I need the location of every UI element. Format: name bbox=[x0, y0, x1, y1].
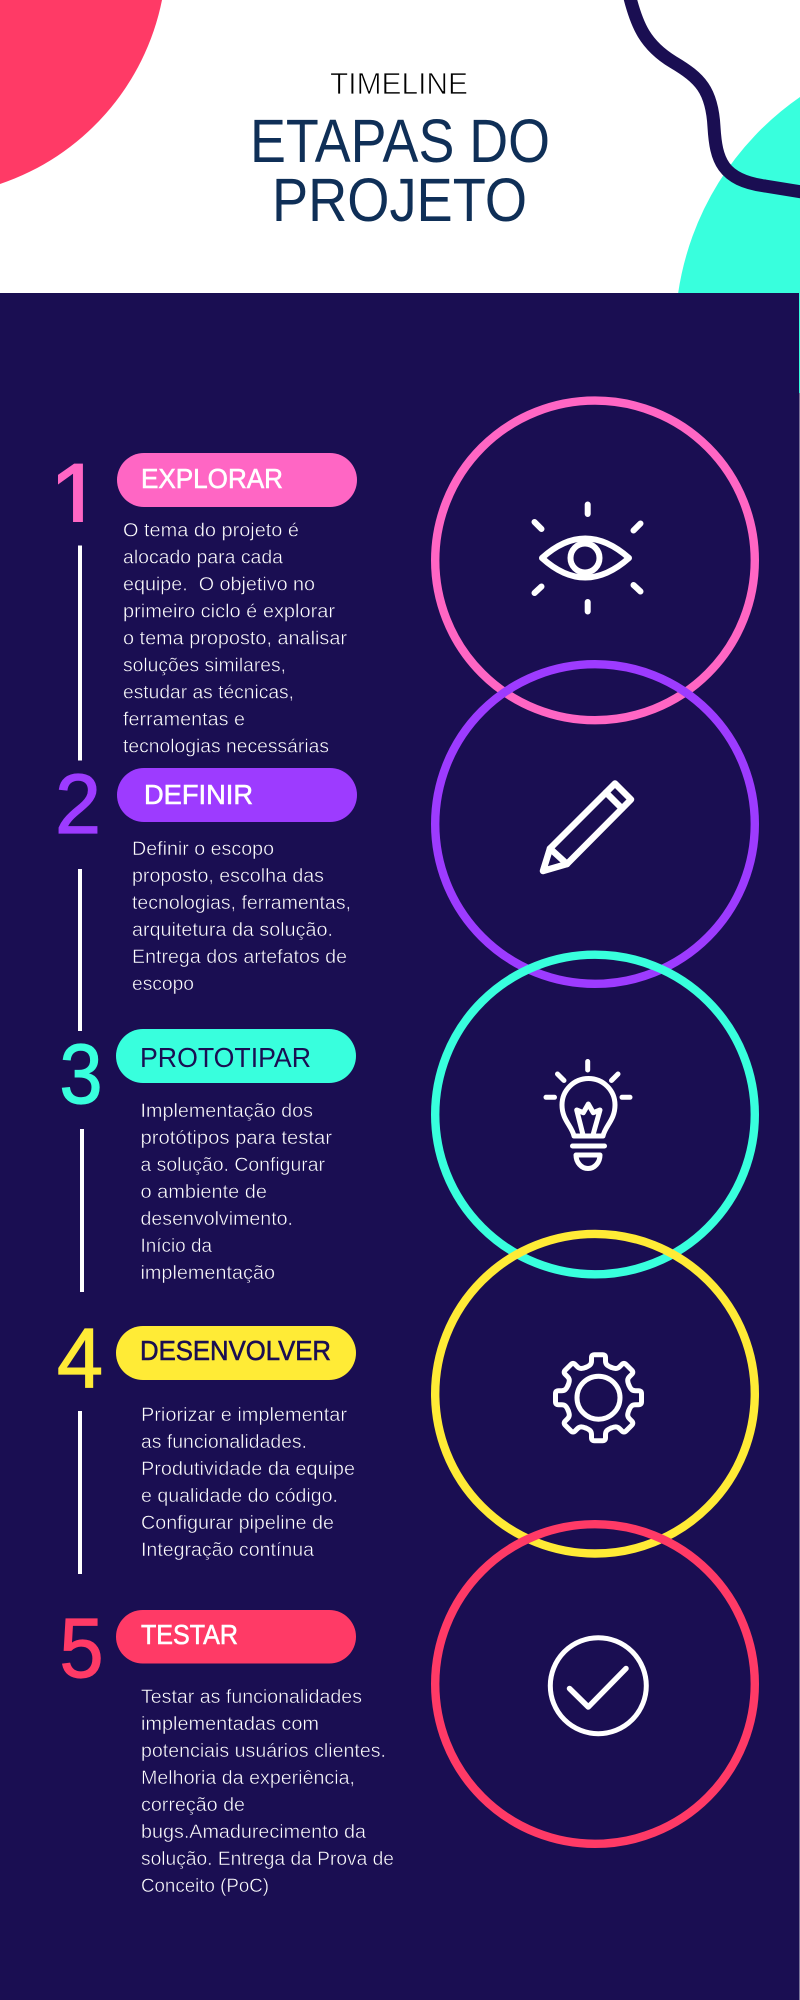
pill label: desenvolver: DESENVOLVER bbox=[140, 1335, 331, 1366]
pill: explorar bbox=[117, 453, 357, 507]
description 3 bbox=[140, 1101, 333, 1284]
icon: eye bbox=[534, 504, 640, 612]
number 3: 3 bbox=[60, 1027, 102, 1121]
pill: testar bbox=[116, 1610, 356, 1664]
description 1: O tema do projeto é bbox=[123, 520, 299, 542]
label: timeline: TIMELINE bbox=[330, 67, 468, 101]
description 2 bbox=[132, 839, 351, 995]
description 5: bugs.Amadurecimento da bbox=[141, 1822, 366, 1843]
number 4: 4 bbox=[57, 1311, 103, 1405]
icon: pencil bbox=[543, 784, 631, 871]
pill: prototipar bbox=[116, 1029, 356, 1083]
number 5: 5 bbox=[60, 1601, 104, 1695]
description 3: protótipos para testar bbox=[140, 1128, 333, 1149]
number 1: 1 bbox=[49, 443, 104, 553]
description 5: correção de bbox=[141, 1795, 245, 1816]
title bbox=[250, 107, 550, 234]
description 5 bbox=[141, 1687, 394, 1897]
description 3: desenvolvimento. bbox=[140, 1209, 293, 1230]
icon: check mark in circle bbox=[550, 1638, 646, 1734]
description 1: equipe. O objetivo no bbox=[123, 574, 315, 596]
icon: light bulb bbox=[546, 1062, 630, 1168]
description 5: Melhoria da experiência, bbox=[141, 1768, 355, 1789]
description 1: soluções similares, bbox=[123, 656, 286, 676]
header shape: red blob bbox=[0, 0, 162, 184]
pill label: prototipar: PROTOTIPAR bbox=[140, 1042, 311, 1073]
description 5: Conceito (PoC) bbox=[141, 1876, 269, 1897]
description 3: implementação bbox=[140, 1263, 275, 1284]
step 4: desenvolver bbox=[57, 1311, 356, 1574]
description 2: arquitetura da solução. bbox=[132, 920, 333, 941]
description 3: a solução. Configurar bbox=[140, 1155, 326, 1176]
pill label: definir: DEFINIR bbox=[144, 779, 253, 810]
connector line 2 bbox=[78, 869, 82, 1031]
description 1 bbox=[123, 520, 348, 758]
title: PROJETO bbox=[272, 166, 527, 234]
header shape: navy wave bbox=[630, 0, 800, 192]
right edge strip bbox=[799, 293, 800, 2000]
description 1: tecnologias necessárias bbox=[123, 736, 329, 758]
description 3: o ambiente de bbox=[140, 1182, 267, 1203]
step 1: explorar bbox=[49, 443, 357, 760]
connector line 4 bbox=[78, 1411, 82, 1574]
description 5: solução. Entrega da Prova de bbox=[141, 1849, 394, 1870]
description 1: alocado para cada bbox=[123, 548, 283, 568]
pill: definir bbox=[117, 768, 357, 822]
description 2: escopo bbox=[132, 974, 194, 995]
description 4: Priorizar e implementar bbox=[141, 1405, 348, 1426]
description 4: Produtividade da equipe bbox=[141, 1459, 355, 1480]
connector line 3 bbox=[80, 1129, 84, 1292]
step 5: testar bbox=[60, 1601, 394, 1897]
description 1: estudar as técnicas, bbox=[123, 682, 294, 704]
step 3: prototipar bbox=[60, 1027, 356, 1292]
description 2: Definir o escopo bbox=[132, 839, 274, 860]
description 2: tecnologias, ferramentas, bbox=[132, 893, 351, 914]
number 2: 2 bbox=[55, 757, 101, 851]
pill label: explorar: EXPLORAR bbox=[141, 463, 283, 494]
title: ETAPAS DO bbox=[250, 107, 550, 175]
description 1: ferramentas e bbox=[123, 710, 245, 730]
description 5: potenciais usuários clientes. bbox=[141, 1741, 386, 1762]
connector line 1 bbox=[78, 546, 82, 760]
description 2: Entrega dos artefatos de bbox=[132, 947, 347, 968]
description 4: e qualidade do código. bbox=[141, 1486, 338, 1507]
description 5: Testar as funcionalidades bbox=[141, 1687, 362, 1708]
description 4: Integração contínua bbox=[141, 1540, 314, 1561]
header shape: teal blob bbox=[678, 97, 800, 294]
pill label: testar: TESTAR bbox=[141, 1619, 238, 1650]
description 4: as funcionalidades. bbox=[141, 1432, 307, 1453]
step 2: definir bbox=[55, 757, 357, 1031]
description 4: Configurar pipeline de bbox=[141, 1513, 334, 1534]
description 3: Início da bbox=[140, 1236, 212, 1257]
circle rings bbox=[435, 401, 755, 1844]
pill: desenvolver bbox=[116, 1326, 356, 1380]
description 4 bbox=[141, 1405, 355, 1561]
icon: gear bbox=[556, 1355, 642, 1441]
description 1: o tema proposto, analisar bbox=[123, 628, 348, 650]
description 3: Implementação dos bbox=[140, 1101, 313, 1122]
description 1: primeiro ciclo é explorar bbox=[123, 602, 336, 622]
description 5: implementadas com bbox=[141, 1714, 319, 1735]
description 2: proposto, escolha das bbox=[132, 866, 324, 887]
